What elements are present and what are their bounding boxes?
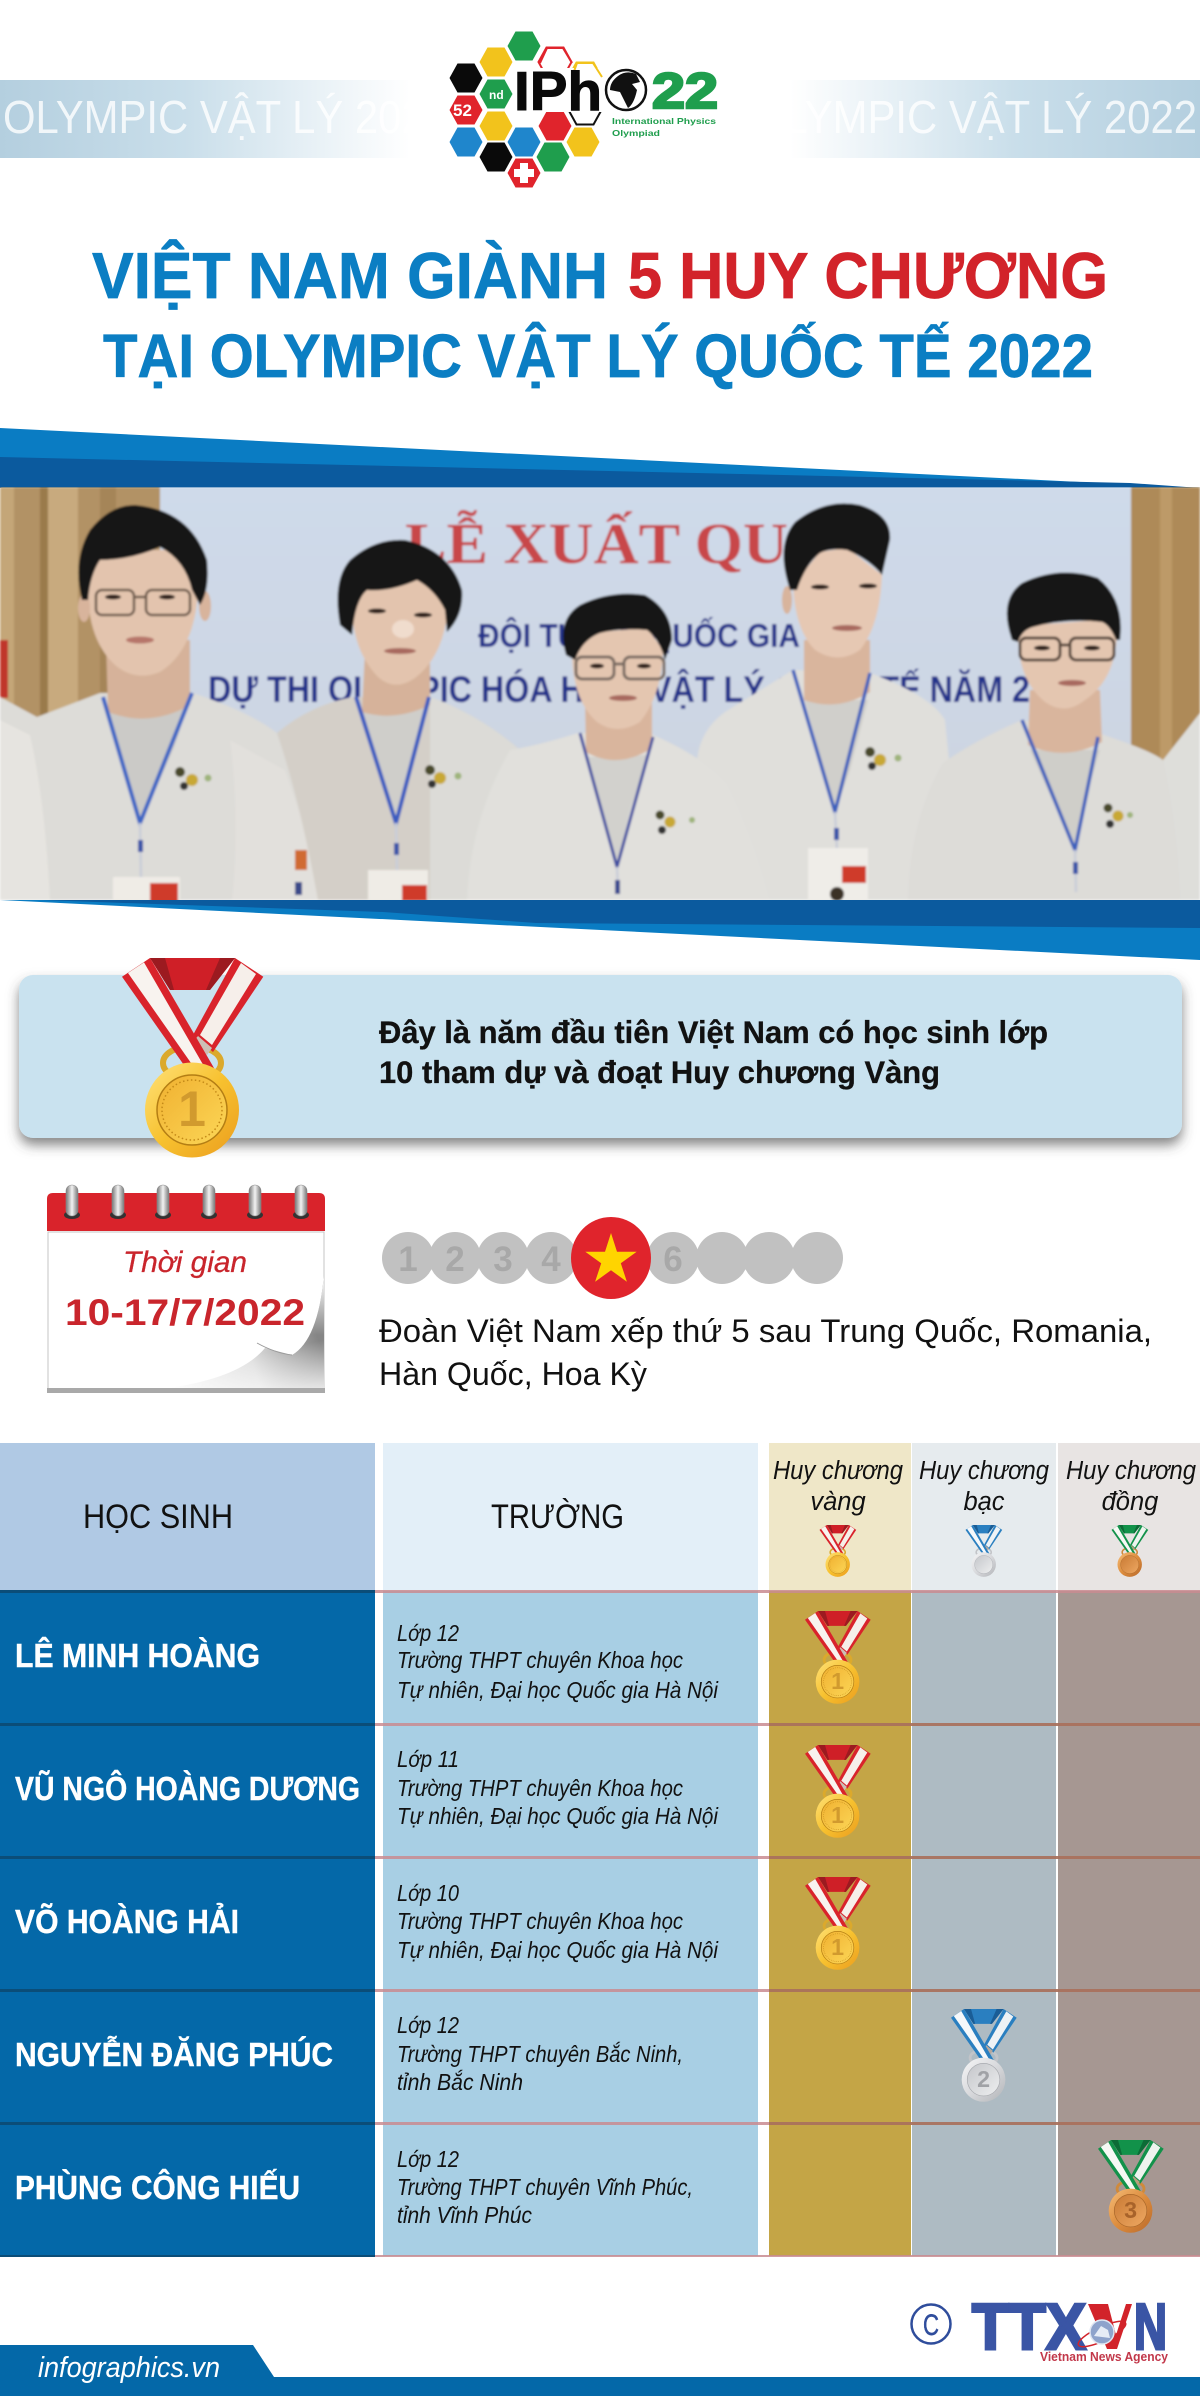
row: Võ Hoàng Hải: VÕ HOÀNG HẢI (15, 1903, 239, 1940)
table header: vàng (810, 1488, 866, 1516)
table header: Huy chương (919, 1457, 1049, 1485)
table header: HỌC SINH (83, 1498, 233, 1536)
row: Vũ Ngô Hoàng Dương: VŨ NGÔ HOÀNG DƯƠNG (15, 1769, 360, 1807)
row: Phùng Công Hiếu: PHÙNG CÔNG HIẾU (15, 2168, 300, 2206)
logo: IPhO 2022 (440, 25, 730, 200)
row: Võ Hoàng Hải: Tự nhiên, Đại học Quốc gia Hà Nội (397, 1937, 719, 1963)
ribbon below photo (0, 900, 1200, 960)
logo: TTXVN: N (1134, 2290, 1167, 2363)
logo: IPhO 2022: nd (489, 88, 504, 102)
icon: calendar with date: 10-17/7/2022 (65, 1292, 305, 1333)
row: Nguyễn Đăng Phúc: Lớp 12 (397, 2012, 459, 2038)
ranking text: Đoàn Việt Nam xếp thứ 5 sau Trung Quốc, Romania, (379, 1313, 1152, 1349)
title: 5 HUY CHƯƠNG (628, 239, 1108, 312)
row: Võ Hoàng Hải: 1 (831, 1934, 844, 1960)
ranking circles with Vietnam flag at 5th: 3 (493, 1240, 513, 1279)
ranking text: Hàn Quốc, Hoa Kỳ (379, 1356, 647, 1392)
ribbon above photo (0, 428, 1200, 488)
row: Phùng Công Hiếu: Lớp 12 (397, 2146, 459, 2172)
copyright symbol: C (923, 2309, 939, 2342)
row: Nguyễn Đăng Phúc: 2 (977, 2066, 990, 2092)
row: Vũ Ngô Hoàng Dương: Tự nhiên, Đại học Quốc gia Hà Nội (397, 1803, 719, 1829)
ranking circles with Vietnam flag at 5th: 4 (541, 1240, 561, 1279)
logo: IPhO 2022: International Physics (612, 116, 716, 126)
row: Lê Minh Hoàng: Trường THPT chuyên Khoa học (397, 1647, 683, 1673)
icon: gold medal (122, 958, 263, 1158)
logo: TTXVN: Vietnam News Agency (1040, 2349, 1169, 2364)
logo: TTXVN (972, 2290, 1169, 2364)
row: Võ Hoàng Hải: Lớp 10 (397, 1880, 459, 1906)
row: Lê Minh Hoàng: 1 (831, 1668, 844, 1694)
icon: calendar with date: Thời gian (123, 1246, 247, 1279)
ranking circles with Vietnam flag at 5th: 6 (663, 1240, 683, 1279)
header band left: OLYMPIC VẬT LÝ 2022 (3, 91, 448, 143)
banner text: LỄ XUẤT QU (405, 511, 788, 576)
student 4 (690, 503, 960, 903)
student 2 (277, 538, 516, 900)
table header: bạc (963, 1488, 1005, 1516)
copyright symbol (912, 2304, 950, 2344)
row: Lê Minh Hoàng (15, 1611, 871, 1704)
student 1 with left neighbour's shoulder (0, 505, 335, 903)
table header (0, 1443, 1200, 1591)
logo: IPhO 2022: IPh (514, 60, 602, 122)
callout text (379, 1014, 1048, 1090)
banner text (208, 511, 1030, 710)
row: Nguyễn Đăng Phúc (15, 2009, 1017, 2102)
ranking circles with Vietnam flag at 5th: 1 (398, 1240, 418, 1279)
student 3 (519, 592, 698, 900)
icon: calendar with date (47, 1185, 325, 1393)
row: Vũ Ngô Hoàng Dương: 1 (831, 1802, 844, 1828)
logo: IPhO 2022: 52 (453, 101, 472, 120)
logo: IPhO 2022: Olympiad (612, 128, 660, 138)
header band left (0, 80, 448, 158)
row: Nguyễn Đăng Phúc: NGUYỄN ĐĂNG PHÚC (15, 2036, 333, 2073)
row: Lê Minh Hoàng: LÊ MINH HOÀNG (15, 1637, 260, 1674)
header band right (752, 80, 1200, 158)
row: Phùng Công Hiếu: tỉnh Vĩnh Phúc (397, 2202, 532, 2228)
row: Lê Minh Hoàng: Lớp 12 (397, 1620, 459, 1646)
ranking circles with Vietnam flag at 5th: 2 (445, 1240, 465, 1279)
photo: team of five students (0, 487, 1200, 903)
row: Nguyễn Đăng Phúc: Trường THPT chuyên Bắc Ninh, (397, 2041, 683, 2067)
title: TẠI OLYMPIC VẬT LÝ QUỐC TẾ 2022 (103, 322, 1093, 390)
table column backgrounds (0, 1590, 1200, 2257)
student 5 with right neighbour's shoulder (950, 571, 1200, 900)
ranking circles with Vietnam flag at 5th (382, 1217, 843, 1299)
callout text: 10 tham dự và đoạt Huy chương Vàng (379, 1054, 940, 1090)
title: VIỆT NAM GIÀNH (92, 239, 608, 312)
title (92, 239, 1108, 390)
table: medal results (0, 1443, 1200, 2257)
row: Phùng Công Hiếu (15, 2140, 1164, 2233)
table header: Huy chương (773, 1457, 903, 1485)
row: Vũ Ngô Hoàng Dương: Trường THPT chuyên Khoa học (397, 1775, 683, 1801)
banner text: ĐỘI TUYỂN QUỐC GIA (478, 616, 800, 654)
callout panel: first grade 10 gold medal (19, 958, 1182, 1158)
logo: IPhO 2022: 22 (652, 63, 718, 119)
icon: gold medal: 1 (178, 1081, 206, 1137)
row: Phùng Công Hiếu: 3 (1124, 2197, 1137, 2223)
table header: TRƯỜNG (491, 1498, 624, 1536)
row: Nguyễn Đăng Phúc: tỉnh Bắc Ninh (397, 2069, 523, 2095)
photo background: wood walls and banner (0, 487, 1200, 761)
banner text: DỰ THI OLYMPIC HÓA HỌC, VẬT LÝ QUỐC TẾ NĂM 2 (208, 668, 1030, 710)
footer bar: infographics.vn (38, 2352, 220, 2384)
row: Võ Hoàng Hải (15, 1877, 871, 1970)
row: Vũ Ngô Hoàng Dương (15, 1745, 871, 1838)
row: Vũ Ngô Hoàng Dương: Lớp 11 (397, 1746, 459, 1772)
ranking text (379, 1313, 1152, 1392)
row: Lê Minh Hoàng: Tự nhiên, Đại học Quốc gia Hà Nội (397, 1677, 719, 1703)
footer bar (0, 2345, 1200, 2396)
callout text: Đây là năm đầu tiên Việt Nam có học sinh lớp (379, 1014, 1048, 1050)
row: Phùng Công Hiếu: Trường THPT chuyên Vĩnh Phúc, (397, 2174, 693, 2200)
row: Võ Hoàng Hải: Trường THPT chuyên Khoa học (397, 1908, 683, 1934)
table header: đồng (1102, 1488, 1158, 1516)
logo: TTXVN: TTX (972, 2290, 1086, 2363)
